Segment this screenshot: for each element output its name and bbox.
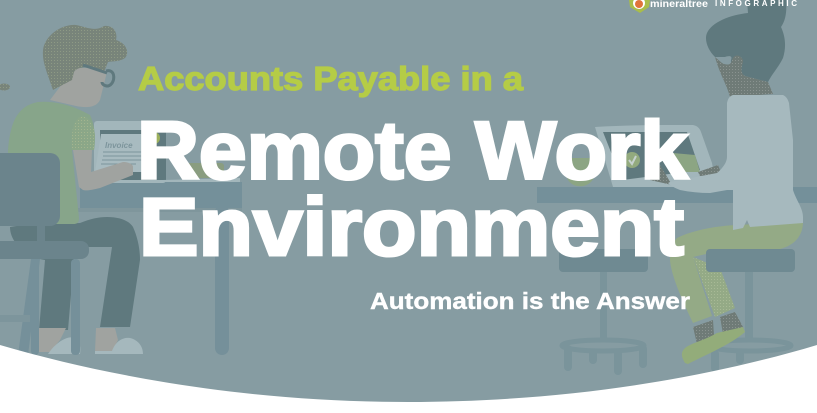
man trousers xyxy=(10,217,140,330)
man chair xyxy=(0,153,89,355)
mug xyxy=(564,158,598,186)
illustration: woman working at desk xyxy=(537,0,817,375)
woman trousers xyxy=(670,222,803,323)
man hair xyxy=(43,25,127,90)
laptop xyxy=(595,125,716,187)
icon: hexagon logo mark xyxy=(629,0,650,13)
man t-shirt xyxy=(8,102,95,224)
desk xyxy=(537,187,817,203)
desk xyxy=(75,182,242,355)
subtitle: accounts payable: Accounts Payable in a xyxy=(138,60,524,97)
woman feet and shoes xyxy=(682,312,745,364)
man neck and head xyxy=(50,68,107,107)
woman back leg xyxy=(693,257,735,317)
illustration: man working at desk xyxy=(0,25,242,355)
laptop with invoice xyxy=(94,121,240,183)
plant blob at left edge xyxy=(0,84,10,90)
woman sweater xyxy=(668,95,803,230)
man feet and shoes xyxy=(38,328,143,354)
stool left xyxy=(559,249,648,375)
tagline: Automation is the Answer xyxy=(370,288,690,314)
title: remote work environment: Remote Work xyxy=(137,106,688,196)
stool seat over legs xyxy=(706,249,795,272)
woman hair xyxy=(706,0,786,82)
logo: mineraltree xyxy=(629,0,708,13)
man glasses xyxy=(83,65,114,86)
man arm xyxy=(73,150,133,190)
laptop with invoice: Invoice xyxy=(105,141,133,150)
title: remote work environment: Environment xyxy=(139,182,684,273)
woman neck xyxy=(715,56,773,97)
title: remote work environment xyxy=(137,106,688,273)
man sleeve xyxy=(72,117,95,150)
woman hands xyxy=(650,165,722,185)
stool right xyxy=(709,270,791,372)
white curved bottom edge xyxy=(0,345,817,413)
